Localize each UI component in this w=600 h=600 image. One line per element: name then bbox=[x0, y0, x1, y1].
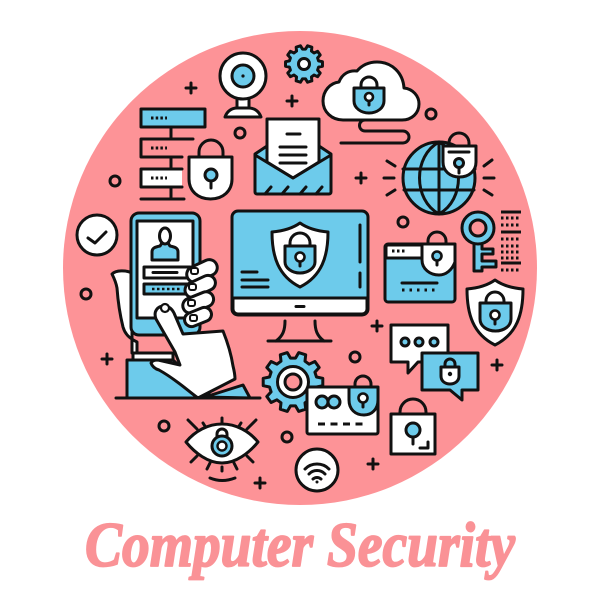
icon: shield with lock bbox=[467, 280, 523, 345]
icon: chat bubbles bbox=[391, 325, 478, 400]
icon: envelope with letter bbox=[255, 119, 331, 194]
binary code block bbox=[501, 212, 521, 270]
icon: shopping lock bbox=[391, 399, 435, 454]
icon: gear top bbox=[286, 46, 322, 82]
icon: globe with lock bbox=[384, 133, 494, 214]
icon: eye with lock bbox=[186, 418, 258, 480]
icon: desktop monitor with shield bbox=[232, 211, 368, 341]
icon: credit card with lock bbox=[307, 376, 378, 434]
icon: padlock bbox=[189, 140, 232, 199]
background circle bbox=[63, 31, 537, 505]
icon: cloud with lock bbox=[323, 62, 419, 143]
icon: webcam bbox=[220, 53, 266, 117]
title: Computer Security bbox=[85, 509, 516, 580]
icon: key bbox=[462, 212, 496, 271]
icon: phone in hand bbox=[112, 213, 260, 398]
icon: check badge bbox=[77, 215, 117, 255]
icon: wifi badge bbox=[296, 449, 338, 491]
icon: browser window with lock bbox=[385, 232, 455, 302]
icon: server hierarchy bbox=[141, 109, 205, 199]
plus and ring accents bbox=[81, 83, 502, 488]
icon: large gear bbox=[263, 353, 323, 411]
